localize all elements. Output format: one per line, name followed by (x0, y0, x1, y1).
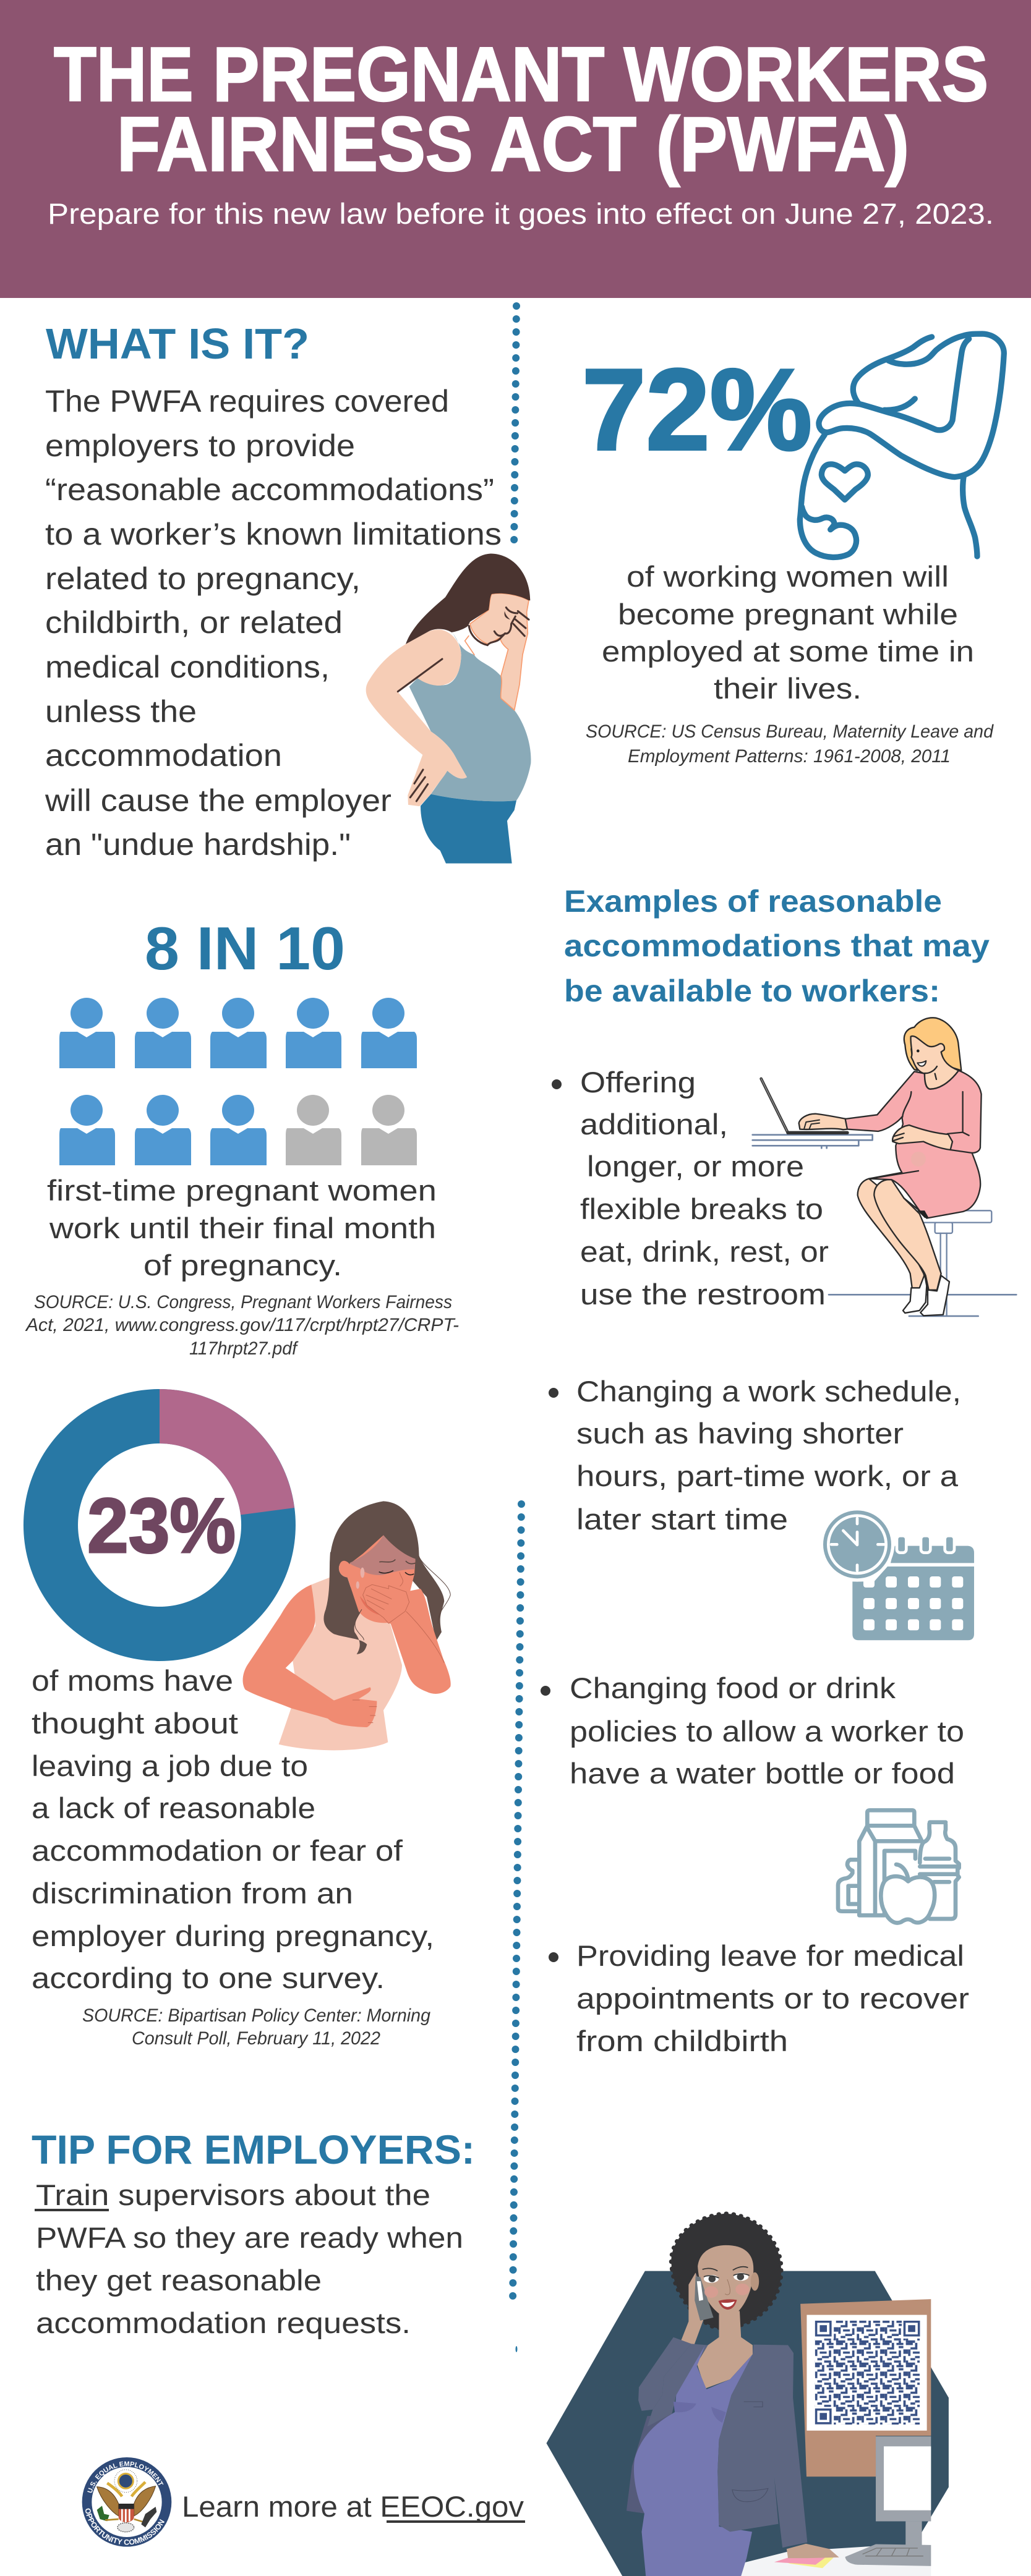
source note: congress: SOURCE: U.S. Congress, Pregnant Workers Fairness (34, 1292, 452, 1312)
text block: tip (35, 2179, 463, 2339)
text block: definition: medical conditions, (45, 650, 330, 684)
text block: tip: accommodation requests. (36, 2306, 411, 2339)
text block: definition: an "undue hardship." (45, 827, 351, 862)
bullet: food or drink policies: Changing food or drink (570, 1672, 896, 1704)
text block: 72 percent caption: of working women will (627, 560, 949, 593)
panel: 8 in 10 statistic (25, 914, 459, 1359)
text block: 23 percent caption: employer during pregnancy, (32, 1919, 434, 1952)
bullet: flexible breaks: longer, or more (587, 1150, 804, 1183)
text block: definition: employers to provide (45, 428, 355, 463)
bullet: medical leave (549, 1939, 969, 2057)
heading: examples: Examples of reasonable (564, 884, 942, 919)
icon: EEOC seal: OPPORTUNITY COMMISSION (85, 2509, 165, 2545)
bullet: work schedule: such as having shorter (576, 1417, 904, 1450)
text block: 72 percent caption: their lives. (714, 672, 862, 705)
text block: definition: accommodation (45, 738, 282, 773)
text block: 8 in 10 caption (47, 1174, 437, 1282)
pictogram: ten people, eight highlighted (59, 998, 417, 1165)
bullet: medical leave: from childbirth (576, 2025, 788, 2057)
text block: definition: “reasonable accommodations” (45, 472, 494, 507)
title: FAIRNESS ACT (PWFA) (117, 102, 909, 187)
bullet: flexible breaks: additional, (580, 1108, 728, 1141)
bullet: work schedule: Changing a work schedule, (576, 1375, 961, 1408)
dotted divider: lower (513, 1504, 521, 2303)
QR code board (800, 2299, 931, 2476)
illustration: pregnant woman working on a laptop on a stool (753, 1018, 1016, 1316)
source note: census: SOURCE: US Census Bureau, Maternity Leave and (586, 721, 994, 742)
panel: 72 percent statistic (582, 334, 1004, 767)
subtitle: Prepare for this new law before it goes into effect on June 27, 2023. (48, 197, 994, 230)
source note: congress: Act, 2021, www.congress.gov/117/crpt/hrpt27/CRPT- (25, 1315, 459, 1335)
text block: definition: childbirth, or related (45, 605, 343, 640)
footer: learn more (82, 2457, 525, 2547)
heading: what is it: WHAT IS IT? (46, 320, 309, 368)
computer monitor (876, 2436, 931, 2546)
bullet: work schedule (549, 1375, 961, 1536)
text block: 8 in 10 caption: first-time pregnant women (47, 1174, 437, 1207)
text block: 23 percent caption: a lack of reasonable (32, 1792, 315, 1824)
illustration: pregnant woman holding her head (366, 553, 531, 864)
icon: EEOC seal: U.S. EQUAL EMPLOYMENT (87, 2462, 163, 2493)
link text: learn more at EEOC.gov: Learn more at EEOC.gov (182, 2490, 524, 2523)
source note: congress (25, 1292, 459, 1359)
illustration: woman covering her mouth (243, 1501, 451, 1750)
source note: bipartisan policy center: Consult Poll, February 11, 2022 (132, 2028, 380, 2049)
desk with notes and keyboard (737, 2544, 931, 2576)
icon: pregnant figure line art with heart (800, 334, 1004, 557)
text block: 23 percent caption: leaving a job due to (32, 1749, 308, 1782)
stat: 23%: 23% (87, 1483, 236, 1569)
icon: food and drinks (838, 1810, 959, 1923)
text block: definition: unless the (45, 694, 197, 729)
bullet: flexible breaks: flexible breaks to (580, 1192, 823, 1225)
text block: definition: to a worker’s known limitations (45, 517, 502, 551)
text block: 8 in 10 caption: work until their final month (49, 1212, 436, 1244)
heading: tip for employers: TIP FOR EMPLOYERS: (32, 2127, 475, 2172)
bullet: medical leave: appointments or to recover (576, 1982, 969, 2015)
heading: examples: accommodations that may (564, 929, 990, 963)
title (54, 32, 988, 187)
text block: 8 in 10 caption: of pregnancy. (143, 1249, 342, 1282)
bullet: food or drink policies: policies to allow a worker to (570, 1715, 964, 1748)
heading: examples: be available to workers: (564, 974, 940, 1008)
text block: tip: Train supervisors about the (36, 2179, 430, 2211)
text block: definition: will cause the employer (45, 783, 391, 818)
bullet: flexible breaks (552, 1066, 829, 1311)
bullet: work schedule: hours, part-time work, or a (576, 1460, 959, 1492)
source note: bipartisan policy center: SOURCE: Bipartisan Policy Center: Morning (82, 2005, 430, 2026)
text block: 23 percent caption: of moms have (32, 1664, 233, 1697)
text block: 23 percent caption: thought about (32, 1707, 238, 1740)
panel: what is it (45, 320, 531, 864)
source note: bipartisan policy center (82, 2005, 430, 2049)
text block: definition: The PWFA requires covered (45, 384, 449, 419)
bullet: food or drink policies (541, 1672, 964, 1790)
bullet: flexible breaks: Offering (580, 1066, 696, 1099)
text block: 72 percent caption: become pregnant while (618, 598, 958, 631)
text block: 23 percent caption: discrimination from an (32, 1877, 353, 1910)
stat: 8 in 10: 8 IN 10 (145, 914, 345, 982)
dotted divider: upper (514, 306, 516, 551)
bullet: flexible breaks: eat, drink, rest, or (580, 1235, 829, 1268)
text block: 23 percent caption: accommodation or fear of (32, 1834, 403, 1867)
text block: 72 percent caption: employed at some time in (602, 635, 974, 668)
woman figure (627, 2214, 839, 2576)
source note: census (586, 721, 994, 767)
text block: tip: PWFA so they are ready when (36, 2221, 463, 2254)
bullet: medical leave: Providing leave for medical (576, 1939, 964, 1972)
header banner (0, 0, 1031, 298)
text block: 23 percent caption: according to one survey. (32, 1962, 385, 1994)
stat: 72%: 72% (582, 345, 812, 474)
bullet: food or drink policies: have a water bottle or food (570, 1757, 955, 1790)
text block: definition (45, 384, 502, 862)
text block: tip: they get reasonable (36, 2264, 322, 2297)
hexagon backdrop (546, 2271, 949, 2576)
bullet: flexible breaks: use the restroom (580, 1278, 826, 1311)
panel: 23 percent statistic (24, 1389, 451, 2049)
source note: congress: 117hrpt27.pdf (189, 1338, 299, 1359)
text block: 72 percent caption (602, 560, 974, 705)
icon: clock and calendar (820, 1507, 974, 1640)
panel: examples of reasonable accommodations (541, 884, 1016, 2057)
donut chart: 23 percent (24, 1389, 296, 1661)
text block: definition: related to pregnancy, (45, 561, 361, 596)
illustration: pregnant woman on the phone at her desk with QR code (546, 2214, 949, 2576)
icon: EEOC seal (82, 2457, 172, 2547)
heading: examples (564, 884, 990, 1008)
panel: tip for employers (32, 2127, 475, 2339)
bullet: work schedule: later start time (576, 1503, 788, 1536)
source note: census: Employment Patterns: 1961-2008, 2011 (628, 746, 951, 767)
text block: 23 percent caption (32, 1664, 434, 1994)
